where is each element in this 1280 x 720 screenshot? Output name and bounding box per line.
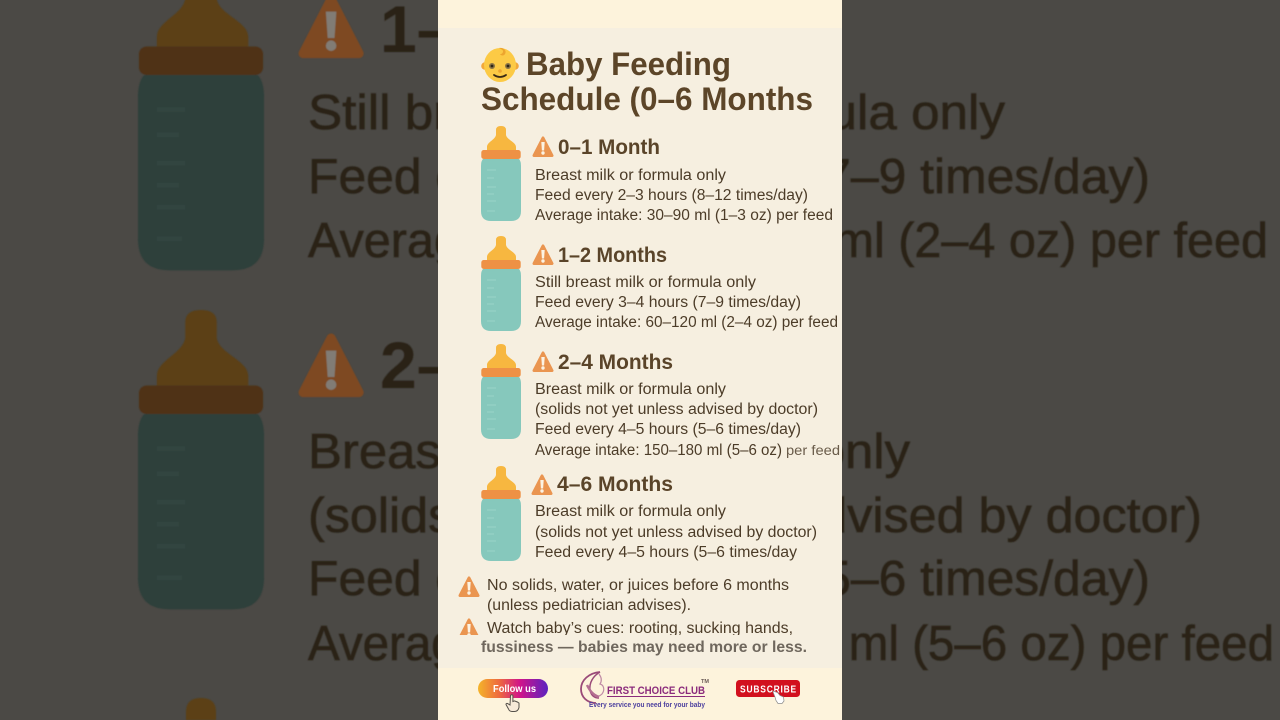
background text block 2: Feed every 4–5 hours (5–6 times/day) bbox=[308, 552, 1150, 606]
text block: Breast milk or formula only bbox=[535, 167, 726, 184]
background text block 1: Feed every 3–4 hours (7–9 times/day) bbox=[308, 150, 1150, 204]
title: Schedule (0–6 Months bbox=[481, 81, 813, 117]
background heading 2-4 months: 2–4 Months bbox=[380, 328, 743, 402]
background text block 2: Breast milk or formula only bbox=[308, 425, 911, 479]
background bottle 2 bbox=[138, 310, 264, 609]
text block: Breast milk or formula only bbox=[535, 503, 726, 520]
icon: bottle bbox=[481, 466, 521, 561]
callout: baby cues note: Watch baby’s cues: rooting, sucking hands, bbox=[487, 620, 793, 637]
icon: warning bbox=[534, 138, 552, 156]
text block bbox=[535, 167, 833, 224]
icon: mother and baby swirl bbox=[581, 672, 604, 703]
text block: Average intake: 60–120 ml (2–4 oz) per feed bbox=[535, 314, 838, 331]
title: Baby Feeding bbox=[526, 46, 731, 82]
icon: hand cursor bbox=[773, 691, 784, 704]
title bbox=[481, 46, 813, 117]
text block: Average intake: 30–90 ml (1–3 oz) per feed bbox=[535, 207, 833, 224]
panel: central schedule card bbox=[438, 0, 842, 720]
text block: (solids not yet unless advised by doctor) bbox=[535, 401, 818, 418]
section: 4-6 months bbox=[481, 466, 817, 561]
icon: bottle bbox=[481, 126, 521, 221]
text block bbox=[535, 274, 838, 331]
callout: baby cues note: fussiness — babies may need more or less. bbox=[481, 639, 807, 656]
section: 1-2 months bbox=[481, 236, 838, 331]
text block: Feed every 2–3 hours (8–12 times/day) bbox=[535, 187, 808, 204]
callout: no solids note: (unless pediatrician advises). bbox=[487, 597, 691, 614]
callout: no solids note bbox=[460, 577, 789, 614]
text block: per feed bbox=[786, 442, 840, 458]
text block: Breast milk or formula only bbox=[535, 381, 726, 398]
heading: 1–2 Months bbox=[558, 244, 667, 267]
section: 2-4 months bbox=[481, 344, 840, 459]
text block bbox=[535, 381, 840, 459]
icon: hand cursor bbox=[506, 695, 519, 712]
icon: bottle bbox=[481, 344, 521, 439]
button: follow us: Follow us bbox=[493, 684, 536, 695]
icon: warning bbox=[533, 476, 551, 494]
text block: Average intake: 150–180 ml (5–6 oz) bbox=[535, 442, 782, 459]
text block: Still breast milk or formula only bbox=[535, 274, 756, 291]
background text block 1: Average intake: 60–120 ml (2–4 oz) per feed bbox=[308, 214, 1268, 268]
background warning icon 1 bbox=[303, 0, 359, 53]
background text block 2 bbox=[308, 425, 1274, 671]
logo: first choice club: Every service you need for your baby bbox=[589, 700, 706, 709]
icon: warning bbox=[534, 246, 552, 264]
section: 0-1 month bbox=[481, 126, 833, 224]
icon: baby face emoji bbox=[481, 48, 519, 82]
heading: 4–6 Months bbox=[557, 473, 673, 496]
callout: baby cues note bbox=[460, 620, 807, 656]
text block: Feed every 4–5 hours (5–6 times/day bbox=[535, 544, 797, 561]
logo: first choice club: TM bbox=[701, 679, 709, 685]
background text block 2: Average intake: 150–180 ml (5–6 oz) per feed bbox=[308, 617, 1274, 671]
button: subscribe: SUBSCRIBE bbox=[740, 684, 797, 696]
background text block 2: (solids not yet unless advised by doctor) bbox=[308, 489, 1202, 543]
logo: first choice club bbox=[581, 672, 709, 709]
icon: warning bbox=[534, 353, 552, 370]
text block: Feed every 4–5 hours (5–6 times/day) bbox=[535, 421, 801, 438]
logo: first choice club: FIRST CHOICE CLUB bbox=[607, 685, 705, 697]
button: subscribe bbox=[736, 680, 800, 704]
callout: no solids note: No solids, water, or juices before 6 months bbox=[487, 577, 789, 594]
icon: bottle bbox=[481, 236, 521, 331]
text block bbox=[535, 503, 817, 561]
background text block 1: Still breast milk or formula only bbox=[308, 86, 1006, 140]
heading: 2–4 Months bbox=[558, 351, 673, 374]
background bottle 3 teat bbox=[186, 698, 216, 720]
heading: 0–1 Month bbox=[558, 136, 660, 159]
background text block 1 bbox=[308, 86, 1268, 268]
text block: (solids not yet unless advised by doctor) bbox=[535, 524, 817, 541]
background warning icon 2 bbox=[303, 338, 359, 392]
button: follow us bbox=[478, 679, 548, 712]
text block: Feed every 3–4 hours (7–9 times/day) bbox=[535, 294, 801, 311]
background bottle 1 bbox=[138, 0, 264, 270]
